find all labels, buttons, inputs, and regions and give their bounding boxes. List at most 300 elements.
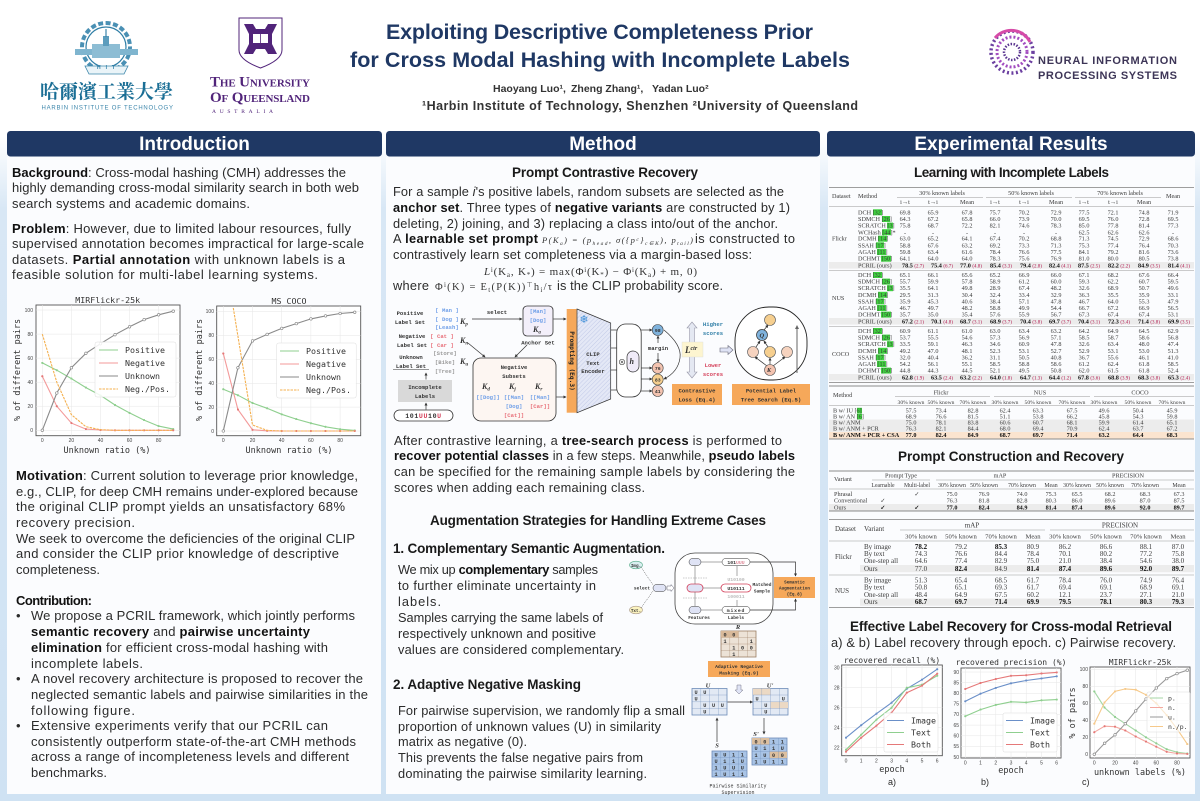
modality inputs: Txt. — [631, 609, 641, 614]
rows: Flickr: 68.7 — [928, 223, 938, 230]
diagram: prompt contrastive recovery pipeline — [393, 306, 810, 421]
authors: Yadan Luo² — [652, 83, 709, 95]
text: complementary augmentation: Samples carrying the same labels of — [398, 610, 603, 625]
table: prompt type variants: Mean — [1172, 483, 1186, 489]
adaptive negative masking box: Adaptive Negative — [715, 664, 763, 670]
score nodes and margin: 98 — [655, 328, 661, 334]
rows: COCO: DCHMT [50] — [858, 368, 892, 375]
chart: MS COCO pair ratios: MS COCO — [272, 296, 306, 306]
rows: NUS: 35.7 — [900, 312, 910, 319]
rows: NUS: 58.8 — [990, 305, 1000, 312]
text: prompt contrastive recovery: ) — [689, 235, 693, 245]
rows: COCO: 56.8 — [1168, 335, 1178, 342]
table: ablation study: 64.4 — [1133, 432, 1143, 439]
negative subsets box: K — [535, 382, 540, 391]
negative subsets box: r — [540, 388, 542, 392]
rows: Flickr: AGAH [11] — [858, 249, 888, 256]
rows: NUS: 67.1 — [1079, 272, 1089, 279]
table: retrieval results with incomplete labels: t→i — [928, 199, 938, 206]
text: prompt contrastive recovery: a — [648, 271, 652, 279]
rows: Flickr: 77.4 — [1108, 242, 1118, 249]
matrix U prime: U — [764, 710, 767, 716]
matrix S prime — [752, 718, 787, 766]
rows: Flickr: - — [904, 229, 906, 236]
rows: Flickr: 62.5 — [1079, 229, 1089, 236]
table: ablation study: B w/ ANM — [833, 419, 861, 426]
rows: Flickr: (2.8) — [1032, 264, 1042, 269]
table: ablation study: B w/ ANM + PCR — [833, 426, 880, 433]
section header: Experimental Results — [827, 131, 1195, 156]
matrix S: S — [715, 742, 719, 750]
contrastive loss block: Loss (Eq.4) — [679, 396, 715, 404]
text: prompt contrastive recovery: ) = max(Φ — [531, 266, 583, 278]
panel background — [828, 157, 1195, 794]
rows: NUS: (3.1) — [972, 320, 982, 325]
chart b: recovered precision: recovered precision (%) — [956, 658, 1066, 667]
matrix S: 1U11 — [714, 772, 744, 778]
UQ country: AUSTRALIA — [212, 109, 273, 115]
table: prompt type variants: Phrasal — [834, 491, 852, 498]
text: prompt contrastive recovery: ⊤ — [526, 281, 533, 289]
chart: MIRFlickr-25k pair ratios: Positive — [125, 345, 165, 355]
semantic augmentation box: (Eq.8) — [787, 592, 802, 598]
table: ablation study: 68.3 — [1167, 432, 1177, 439]
rows: NUS: PCRIL (ours) — [858, 318, 892, 325]
text: contribution: Contribution: — [16, 593, 92, 608]
chart a: recovered recall — [834, 656, 942, 787]
rows: NUS: 57.8 — [962, 279, 972, 286]
rows: COCO: 52.9 — [1079, 348, 1089, 355]
rows: Flickr: 71.3 — [1051, 242, 1061, 249]
text: prompt contrastive recovery: where — [392, 278, 429, 293]
rows: COCO: 58.7 — [1108, 335, 1118, 342]
R matrix — [721, 624, 756, 658]
rows: Flickr: 58.8 — [900, 242, 910, 249]
section header: Method — [386, 131, 820, 156]
text: prompt contrastive recovery: a — [507, 271, 511, 279]
rows: NUS: 35.4 — [962, 312, 972, 319]
rows: NUS: 67.4 — [1139, 312, 1149, 319]
table: retrieval results with incomplete labels: Mean — [1137, 199, 1151, 206]
rows: COCO: 52.4 — [1168, 368, 1178, 375]
table: one-step recovery variants: 21.0 — [1172, 591, 1185, 599]
rows: Flickr — [858, 210, 1190, 269]
rows: COCO: 64.2 — [1079, 328, 1089, 335]
contrastive loss block: Higher — [703, 321, 723, 328]
table: prompt type variants: 70% known — [1008, 483, 1036, 489]
table: prompt type variants: Learnable — [871, 483, 895, 489]
caption: pairwise similarity supervision — [709, 784, 767, 796]
rows: COCO: 32.6 — [1079, 341, 1089, 348]
text: motivation: We seek to overcome the deficiencies of the original CLIP — [16, 531, 355, 546]
negative subsets box: Negative — [501, 364, 528, 371]
rows: COCO: 58.5 — [990, 361, 1000, 368]
rows: NUS: 62.2 — [1108, 279, 1118, 286]
rows: Flickr: 64.0 — [962, 256, 972, 263]
rows: Flickr: SCRATCH [3] — [858, 223, 895, 230]
rows: COCO: 47.4 — [1168, 341, 1178, 348]
matched sample box — [675, 553, 773, 624]
table: ablation study: 70% known — [1059, 400, 1086, 406]
text: complementary augmentation: to further eliminate uncertainty in — [398, 578, 596, 593]
negative subsets box — [473, 358, 556, 421]
table: one-step recovery variants: 68.5 — [995, 576, 1008, 584]
rows: NUS: 70.4 — [1078, 318, 1089, 325]
table: one-step recovery variants: 69.7 — [955, 598, 968, 606]
rows: Flickr: 74.6 — [1019, 223, 1029, 230]
panel: Introduction — [7, 131, 382, 794]
text: prompt contrastive recovery: ) − Φ — [605, 266, 631, 278]
chart a: recovered recall: 4 — [905, 758, 908, 764]
label sets: u — [465, 362, 468, 368]
table: one-step recovery variants: By text — [864, 584, 884, 592]
rows: COCO: 61.5 — [1108, 368, 1118, 375]
rows: NUS: 55.9 — [1019, 312, 1029, 319]
negative subsets box: Subsets — [502, 373, 526, 380]
rows: COCO: 44.8 — [900, 368, 910, 375]
text: adaptive negative masking: dominating the pairwise similarity learning. — [398, 766, 647, 781]
table: ablation study: B w/ ANM + PCR + CSA — [833, 432, 900, 439]
table: ablation study: 63.7 — [1133, 426, 1143, 433]
contrastive loss block: scores — [703, 371, 724, 378]
table: ablation study: 65.1 — [1167, 419, 1177, 426]
text: motivation: completeness. — [16, 562, 100, 577]
rows: COCO: AGAH [11] — [858, 361, 888, 368]
table: one-step recovery variants: mAP — [965, 522, 979, 530]
NeurIPS wordmark: NEURAL INFORMATION — [1038, 55, 1177, 67]
table: ablation study: 75.0 — [906, 419, 916, 426]
chart: MS COCO pair ratios: 80 — [337, 438, 343, 444]
table: one-step recovery variants: 84.9 — [995, 565, 1008, 573]
rows: NUS: DCHMT [50] — [858, 312, 892, 319]
matched sample box: 101UUU — [727, 560, 745, 566]
chart b: recovered precision: 60 — [953, 734, 959, 740]
table: ablation study: 61.4 — [1133, 419, 1143, 426]
rows: Flickr: 82.4 — [1049, 262, 1060, 269]
table: ablation study: COCO — [1131, 390, 1149, 396]
table: one-step recovery variants: 65.4 — [955, 576, 968, 584]
rows: NUS: 67.4 — [1108, 312, 1118, 319]
chart a: recovered recall: 24 — [834, 726, 840, 732]
text: prompt contrastive recovery: i — [584, 266, 586, 274]
text: background: search systems and academic domains. — [12, 196, 250, 211]
rows: NUS: (3.8) — [1150, 320, 1160, 325]
chart c: pairwise recovery: n./p. — [1168, 723, 1188, 731]
table: ablation study: 68.9 — [906, 413, 916, 420]
chart b: recovered precision: Image — [1030, 716, 1055, 726]
table: ablation study: Method — [833, 392, 853, 399]
rows: NUS: 57.1 — [1019, 298, 1029, 305]
rows: COCO: 63.0 — [990, 328, 1000, 335]
chart: MIRFlickr-25k pair ratios: MIRFlickr-25k — [75, 295, 140, 305]
table: ablation study: 30% known — [1091, 400, 1118, 406]
rows: COCO: 57.1 — [1051, 335, 1061, 342]
chart c: pairwise recovery — [1068, 658, 1190, 787]
negative subsets box: [Dog] — [506, 403, 522, 410]
negative subsets box: [Cat]] — [504, 412, 524, 419]
table: retrieval results with incomplete labels: 50% known labels — [1008, 190, 1054, 197]
section header: Experimental Results: Experimental Results — [914, 134, 1108, 155]
text: contribution: • — [16, 671, 21, 686]
rows: COCO: 54.2 — [900, 361, 910, 368]
chart: MS COCO pair ratios: 40 — [279, 438, 285, 444]
chart b: recovered precision: epoch — [998, 766, 1024, 776]
rows: COCO: 41.0 — [1168, 354, 1178, 361]
text: contribution: across a range of incompleteness levels and different — [31, 749, 349, 764]
table: ablation study: 49.6 — [1099, 407, 1109, 414]
table: ablation study: 76.3 — [906, 426, 916, 433]
rows: Flickr: 71.3 — [1079, 236, 1089, 243]
authors — [493, 83, 709, 95]
text: prompt contrastive recovery: deleting, 2) joining, and 3) replacing a class into/out of the anchor. — [393, 216, 778, 231]
rows: NUS: 49.6 — [1168, 285, 1178, 292]
text: prompt contrastive recovery: , K — [511, 266, 526, 278]
table: one-step recovery variants: 69.4 — [1059, 584, 1072, 592]
potential label tree search: Potential Label — [746, 388, 797, 394]
score nodes and margin — [641, 324, 680, 396]
rows: COCO: 46.3 — [962, 341, 972, 348]
chart a: recovered recall: 2 — [875, 758, 878, 764]
text: prompt contrastive recovery: i — [632, 266, 634, 274]
rows: NUS: 55.7 — [900, 279, 910, 286]
table: prompt type variants: 87.4 — [1072, 505, 1082, 512]
chart b: recovered precision: 90 — [953, 670, 959, 676]
table: one-step recovery variants: 48.4 — [915, 591, 928, 599]
chart a: recovered recall: Both — [911, 740, 931, 750]
negative subsets box: K — [509, 382, 514, 391]
table: prompt type variants: Conventional — [834, 498, 868, 505]
matrix S prime: 1U11 — [754, 760, 784, 766]
rows: COCO: 63.2 — [1051, 328, 1061, 335]
rows: COCO: 63.4 — [1108, 341, 1118, 348]
select label: select — [487, 309, 507, 316]
R matrix: 100 — [732, 645, 753, 651]
chart a: recovered recall: 1 — [860, 758, 863, 764]
table: prompt type variants: 84.9 — [1017, 505, 1027, 512]
label sets — [393, 307, 468, 375]
chart b: recovered precision: 65 — [953, 723, 959, 729]
chart b: recovered precision: 75 — [953, 702, 959, 708]
rows: NUS: 32.6 — [1079, 285, 1089, 292]
table: ablation study: 76.6 — [936, 413, 946, 420]
matrix S: UU11 — [714, 752, 744, 758]
rows: Flickr: 67.4 — [990, 236, 1000, 243]
table: one-step recovery variants: NUS — [835, 587, 849, 595]
rows: Flickr: SSAH [17] — [858, 242, 886, 249]
table: one-step recovery variants: 75.8 — [1172, 550, 1185, 558]
contrastive loss block: Contrastive — [679, 388, 716, 394]
chart: MS COCO pair ratios: 0 — [211, 429, 214, 435]
rows: Flickr: 70.0 — [1051, 216, 1061, 223]
rows: COCO: 55.1 — [962, 361, 972, 368]
table: one-step recovery variants: 74.9 — [1140, 576, 1153, 584]
rows: NUS: 32.9 — [1051, 292, 1061, 299]
UQ wordmark: The University — [210, 75, 310, 91]
rows: COCO: 63.4 — [1019, 328, 1029, 335]
rows: NUS: 67.2 — [902, 318, 913, 325]
NeurIPS wordmark line 2: PROCESSING SYSTEMS — [1038, 70, 1177, 82]
rows: COCO: 61.0 — [962, 328, 972, 335]
table: prompt type variants: ✓ — [880, 498, 886, 505]
table: retrieval results with incomplete labels: i→t — [1079, 199, 1089, 206]
title: Exploiting Descriptive Completeness Prior — [386, 20, 814, 44]
CLIP text encoder: ❄ — [579, 314, 589, 326]
panel: Experimental Results — [827, 131, 1195, 794]
rows: COCO: DCMH [14] — [858, 348, 888, 355]
rows: Flickr: (3.5) — [1150, 264, 1160, 269]
chart: MS COCO pair ratios — [195, 296, 361, 456]
rows: NUS: (3.7) — [1002, 320, 1012, 325]
table: prompt type variants: 67.3 — [1174, 491, 1184, 498]
icon: NeurIPS dotted circle — [991, 30, 1033, 73]
rows: NUS: 35.5 — [900, 285, 910, 292]
rows: COCO: 62.8 — [902, 374, 913, 381]
text: prompt contrastive recovery: } — [640, 235, 644, 245]
table: one-step recovery variants: Mean — [1025, 534, 1041, 540]
rows: Flickr: SDMCH [26] — [858, 216, 892, 223]
table: one-step recovery variants: 78.1 — [1100, 598, 1113, 606]
text: complementary augmentation: We mix up complementary samples — [398, 562, 598, 577]
rows: Flickr: (2.5) — [1090, 264, 1100, 269]
rows: NUS: 46.7 — [1079, 298, 1089, 305]
rows: Flickr: (2.2) — [1120, 264, 1130, 269]
text: prompt contrastive recovery: /τ — [544, 282, 552, 293]
table: one-step recovery variants: 69.3 — [995, 584, 1008, 592]
chart: MIRFlickr-25k pair ratios: 60 — [27, 356, 33, 362]
label sets: n — [465, 342, 468, 346]
rows: COCO: 48.1 — [962, 348, 972, 355]
table: ablation study: 67.2 — [1167, 426, 1177, 433]
table: ablation study: 83.8 — [968, 419, 978, 426]
table: prompt type variants: Mean — [1044, 483, 1058, 489]
chart: MS COCO pair ratios: 60 — [308, 438, 314, 444]
table: ablation study: 62.4 — [1000, 407, 1010, 414]
text: prompt contrastive recovery: i — [491, 266, 493, 274]
table: ablation study: 63.2 — [1099, 432, 1109, 439]
table: one-step recovery variants: 77.2 — [1140, 550, 1153, 558]
rows: NUS: 33.1 — [1168, 292, 1178, 299]
text: adaptive negative masking: For pairwise supervision, we randomly flip a small — [398, 703, 685, 718]
rows: Flickr: (4.8) — [972, 264, 982, 269]
label sets: p — [464, 322, 468, 328]
table: ablation study: 50.4 — [1133, 407, 1143, 414]
table: prompt type variants: Prompt Type — [885, 472, 917, 480]
chart a: recovered recall: recovered recall (%) — [844, 656, 940, 665]
rows: COCO: 36.2 — [962, 354, 972, 361]
table: one-step recovery variants: Mean — [1170, 534, 1186, 540]
rows: COCO: 53.0 — [1139, 348, 1149, 355]
table: retrieval results with incomplete labels: Mean — [1049, 199, 1063, 206]
rows: NUS: 47.9 — [1168, 298, 1178, 305]
table: one-step recovery variants: By text — [864, 550, 884, 558]
chart b: recovered precision: 55 — [953, 744, 959, 750]
rows: Flickr: DCH [32] — [858, 210, 883, 216]
incomplete labels box — [398, 380, 452, 402]
table: prompt type variants: ✓ — [914, 505, 920, 512]
table: ablation study: 73.4 — [936, 407, 946, 414]
anchor box: [Man] — [530, 308, 546, 315]
text: motivation: recovery precision. — [16, 515, 135, 530]
rows: NUS: SSAH [17] — [858, 298, 886, 305]
chart b: recovered precision: 0 — [964, 760, 967, 766]
rows: NUS: 53.1 — [1168, 312, 1178, 319]
contrastive loss block: scores — [703, 330, 724, 337]
label sets: [Store] — [433, 350, 457, 357]
chart a: recovered recall: 3 — [890, 758, 893, 764]
table: ablation study: 62.4 — [1099, 426, 1109, 433]
text: prompt contrastive recovery: A learnable set prompt — [393, 231, 539, 246]
rows: Flickr: (6.7) — [943, 264, 953, 269]
UQ wordmark line 2: Of Queensland — [210, 90, 310, 106]
table: one-step recovery variants: 79.3 — [1172, 598, 1185, 606]
rows: COCO: 49.5 — [1019, 368, 1029, 375]
rows: Flickr: 72.2 — [962, 223, 972, 230]
rows: NUS: (2.1) — [914, 320, 924, 325]
rows: NUS: 71.4 — [1138, 318, 1149, 325]
rows: Flickr: 77.5 — [1079, 210, 1089, 216]
rows: Flickr: 72.9 — [1051, 210, 1061, 216]
table: one-step recovery variants: 92.0 — [1140, 565, 1153, 573]
rows: COCO: 57.3 — [990, 335, 1000, 342]
incomplete labels box: Labels — [415, 393, 436, 400]
semantic augmentation box — [750, 562, 815, 610]
rows: NUS: 32.4 — [990, 292, 1000, 299]
rows: Flickr: 77.8 — [1108, 223, 1118, 230]
table: ablation study: 66.2 — [1067, 413, 1077, 420]
text: contribution: Extensive experiments verify that our PCRIL can — [31, 718, 328, 733]
rows: Flickr: (2.7) — [914, 264, 924, 269]
rows: COCO: 64.7 — [1020, 374, 1031, 381]
rows: COCO: 61.2 — [1079, 361, 1089, 368]
table: ablation study: 78.1 — [936, 419, 946, 426]
rows: NUS: 66.1 — [928, 272, 938, 279]
section header: Introduction: Introduction — [139, 134, 250, 155]
caption: pairwise similarity supervision: Supervision — [721, 790, 755, 796]
chart: MS COCO pair ratios: 40 — [208, 381, 214, 387]
table: ablation study: 70% known — [960, 400, 987, 406]
table: one-step recovery variants: 80.9 — [1027, 543, 1040, 551]
rows: COCO: DCH [32] — [858, 328, 883, 335]
rows: Flickr: 67.2 — [928, 216, 938, 223]
rows: NUS: 49.7 — [928, 305, 938, 312]
text: contribution: incomplete labels. — [31, 656, 143, 671]
text: prompt contrastive recovery: is the CLIP probability score. — [557, 278, 723, 293]
rows: COCO: 50.5 — [1019, 354, 1029, 361]
rows: Flickr: 78.3 — [990, 256, 1000, 263]
chart: MIRFlickr-25k pair ratios: 80 — [156, 438, 162, 444]
table: one-step recovery variants: Ours — [864, 565, 878, 573]
rows: NUS: 66.4 — [1168, 272, 1178, 279]
table: retrieval results with incomplete labels: Flickr — [832, 236, 847, 242]
rows: Flickr: 78.5 — [902, 262, 913, 269]
table: ablation study: 70.9 — [1067, 426, 1077, 433]
chart c: pairwise recovery: 0 — [1085, 752, 1088, 758]
modality inputs: select — [634, 586, 650, 592]
matched sample box: Features — [688, 615, 710, 621]
rows: NUS: 46.7 — [900, 305, 910, 312]
matrix U prime: U' — [767, 682, 773, 690]
label sets: Positive — [397, 310, 424, 317]
rows: NUS: 36.3 — [1079, 292, 1089, 299]
table: retrieval results with incomplete labels: NUS — [832, 295, 845, 302]
R matrix: 11 — [724, 639, 753, 645]
label sets: [Bike] — [435, 359, 455, 366]
table: prompt type variants — [829, 471, 1194, 512]
table: ablation study: 60.7 — [1033, 419, 1043, 426]
rows: COCO: (1.8) — [1002, 376, 1012, 381]
table: ablation study: Flickr — [934, 390, 948, 396]
CLIP text encoder: Encoder — [581, 368, 605, 375]
